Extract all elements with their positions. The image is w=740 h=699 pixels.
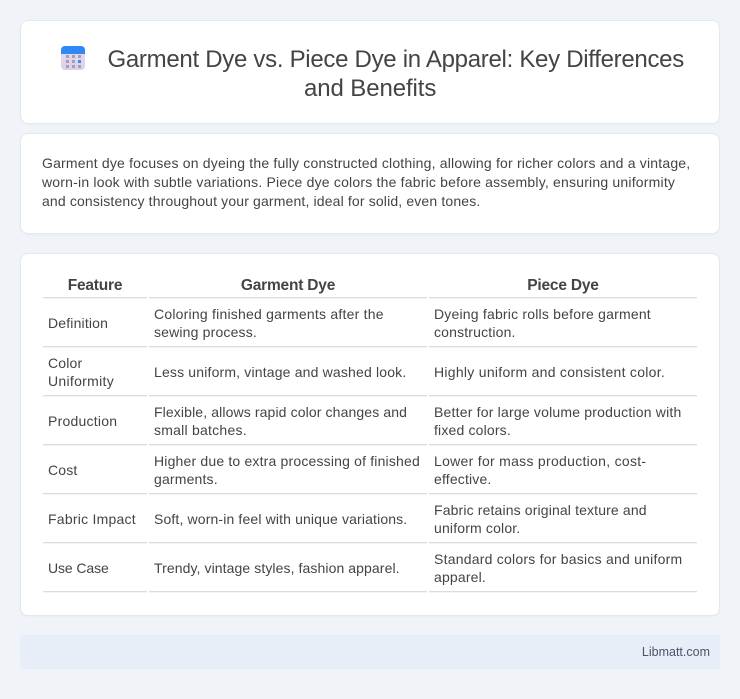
table: comparison: effective. xyxy=(434,471,491,487)
title: Garment Dye vs. Piece Dye in Apparel: Key Differences xyxy=(108,46,684,73)
footer bar xyxy=(20,635,720,669)
table: comparison: Lower for mass production, cost- xyxy=(434,453,646,469)
table: comparison: Fabric retains original texture and xyxy=(434,502,647,518)
footer text: Libmatt.com xyxy=(642,645,710,659)
table: comparison: uniform color. xyxy=(434,520,520,536)
panel: comparison table card xyxy=(20,253,720,616)
table: comparison: apparel. xyxy=(434,569,486,585)
icon: calendar xyxy=(61,46,85,70)
table: comparison: sewing process. xyxy=(154,324,257,340)
table: comparison: Production xyxy=(48,413,117,429)
table: comparison: small batches. xyxy=(154,422,247,438)
table: comparison: Color xyxy=(48,355,82,371)
table: comparison: Higher due to extra processing of finished xyxy=(154,453,420,469)
title: and Benefits xyxy=(304,75,436,102)
table: comparison: Trendy, vintage styles, fashion apparel. xyxy=(154,560,400,576)
table: comparison: Definition xyxy=(48,315,108,331)
table: comparison: Standard colors for basics and uniform xyxy=(434,551,682,567)
table: comparison: Uniformity xyxy=(48,373,114,389)
table: comparison: Fabric Impact xyxy=(48,511,136,527)
table: comparison: Flexible, allows rapid color changes and xyxy=(154,404,407,420)
table: comparison: Garment Dye xyxy=(241,277,335,294)
table: comparison: Feature xyxy=(68,277,122,294)
table: comparison: Coloring finished garments after the xyxy=(154,306,384,322)
table: comparison xyxy=(43,277,697,593)
table: comparison: garments. xyxy=(154,471,218,487)
table: comparison: Better for large volume production with xyxy=(434,404,681,420)
table: comparison: Cost xyxy=(48,462,77,478)
table: comparison: construction. xyxy=(434,324,516,340)
panel: title card xyxy=(20,20,720,124)
table: comparison: Soft, worn-in feel with unique variations. xyxy=(154,511,407,527)
panel: intro card xyxy=(20,133,720,234)
text block: intro paragraph: worn-in look with subtle variations. Piece dye colors the fabric before assembly, ensuring uniformity xyxy=(42,174,675,190)
table: comparison: Less uniform, vintage and washed look. xyxy=(154,364,406,380)
text block: intro paragraph: and consistency throughout your garment, ideal for solid, even tones. xyxy=(42,193,480,209)
table: comparison: Use Case xyxy=(48,560,109,576)
text block: intro paragraph xyxy=(42,155,690,209)
table: comparison: fixed colors. xyxy=(434,422,511,438)
table: comparison: Piece Dye xyxy=(527,277,599,294)
text block: intro paragraph: Garment dye focuses on dyeing the fully constructed clothing, allowing for richer colors and a vintage, xyxy=(42,155,690,171)
table: comparison: Highly uniform and consistent color. xyxy=(434,364,665,380)
title xyxy=(108,46,684,102)
table: comparison: Dyeing fabric rolls before garment xyxy=(434,306,651,322)
